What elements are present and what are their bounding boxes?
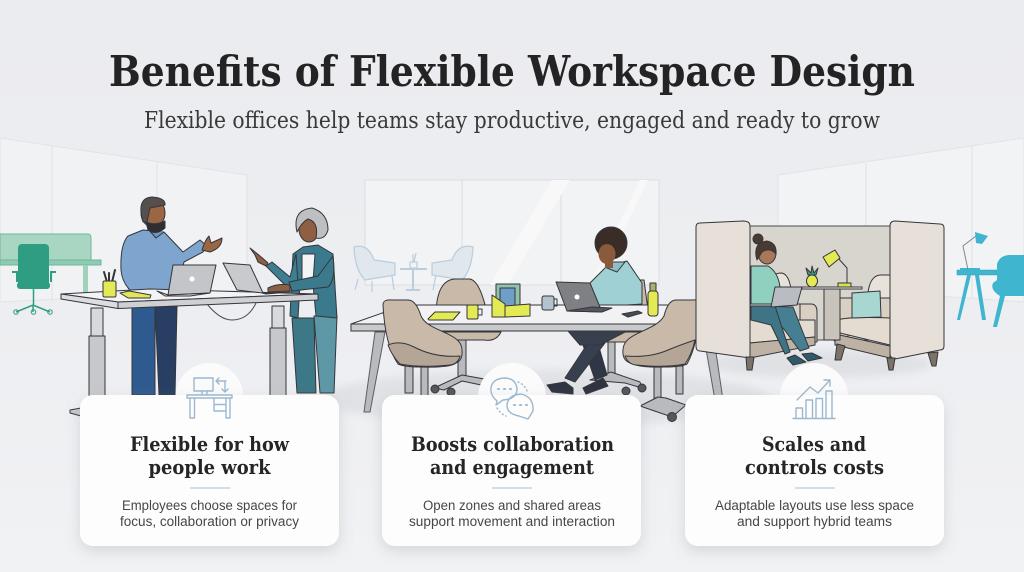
card: flexible for how people work (80, 363, 339, 546)
front left chair (383, 300, 462, 397)
pen holder and notebook (103, 270, 151, 298)
icon: speech bubbles (491, 378, 533, 419)
desk top (61, 289, 318, 308)
card body (715, 498, 914, 529)
green background desk and chair (0, 234, 101, 314)
card body (120, 498, 299, 529)
card: scales and controls costs (685, 363, 944, 546)
desk legs (70, 306, 286, 416)
table objects (428, 282, 658, 320)
card: boosts collaboration and engagement (382, 363, 641, 546)
front right chair (623, 300, 700, 422)
card heading: Boosts collaboration (411, 432, 614, 456)
woman standing (250, 208, 337, 393)
card body: focus, collaboration or privacy (120, 514, 299, 529)
icon: growth chart (793, 380, 835, 418)
side table lamp and plant (802, 250, 862, 340)
booth left panel (696, 221, 750, 358)
laptops (157, 263, 290, 296)
card heading: controls costs (745, 455, 884, 479)
title: Benefits of Flexible Workspace Design (109, 47, 915, 96)
card heading: people work (148, 455, 272, 479)
card heading (411, 432, 614, 479)
privacy booth (696, 221, 944, 370)
seated woman at table (547, 227, 648, 395)
card body: and support hybrid teams (737, 514, 892, 529)
back chair at table (431, 279, 501, 396)
card body: Open zones and shared areas (423, 498, 601, 513)
card heading: Flexible for how (130, 432, 290, 456)
distant lounge chairs (354, 246, 473, 292)
card body: support movement and interaction (409, 514, 615, 529)
booth right panel (890, 221, 944, 359)
card heading (745, 432, 884, 479)
woman in booth (751, 234, 822, 365)
sofas (746, 273, 890, 370)
card body (409, 498, 615, 529)
meeting table (351, 305, 737, 412)
subtitle: Flexible offices help teams stay productive, engaged and ready to grow (144, 108, 880, 134)
standing desk scene (61, 197, 337, 416)
card body: Employees choose spaces for (122, 498, 297, 513)
card heading: Scales and (762, 432, 866, 456)
card heading: and engagement (430, 455, 595, 479)
blue desk, lamp and chair (957, 232, 1024, 327)
icon: desk with monitor (187, 378, 232, 418)
card heading (130, 432, 290, 479)
man standing (121, 197, 222, 395)
card body: Adaptable layouts use less space (715, 498, 914, 513)
desk cable (207, 303, 256, 320)
